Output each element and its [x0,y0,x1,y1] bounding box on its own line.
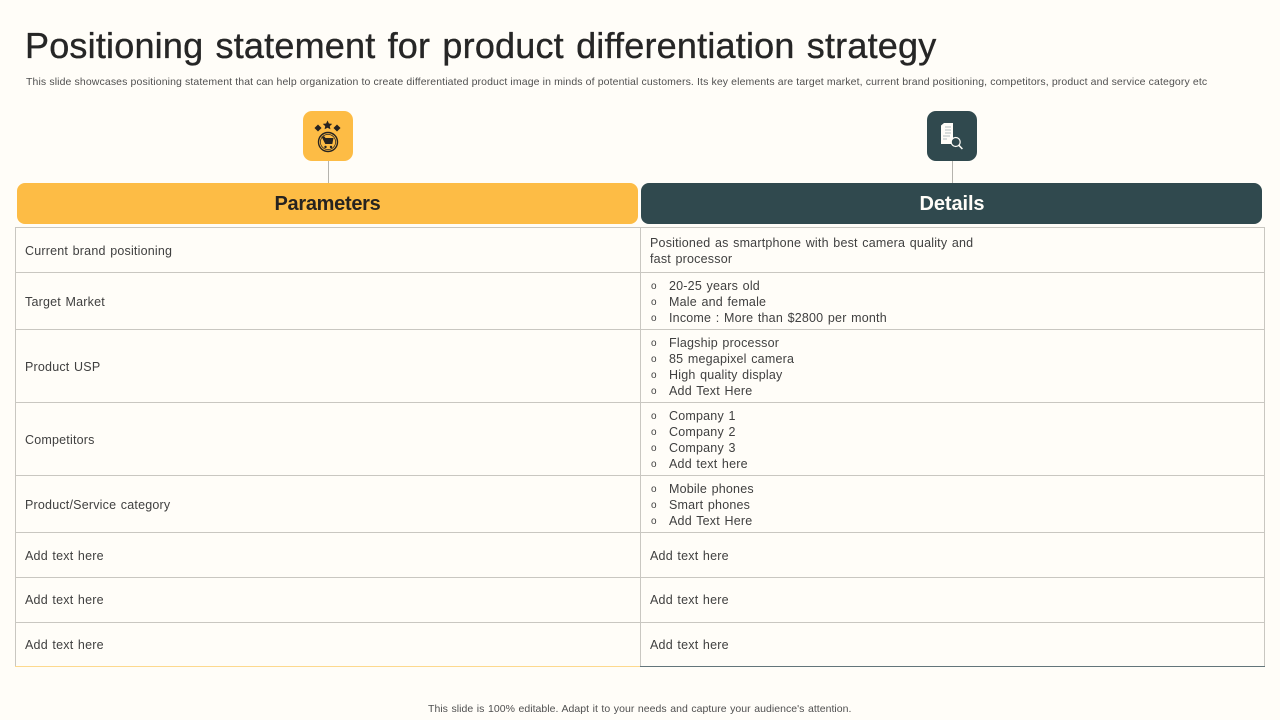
title: Positioning statement for product differentiation strategy [25,25,936,66]
detail list: product/service category: Add Text Here [669,514,752,528]
detail list: product USP: o [651,354,657,365]
detail list: competitors: Company 2 [669,425,736,439]
detail list: competitors: o [651,427,657,438]
row label: product USP: Product USP [25,360,100,374]
header: details: Details [920,193,984,215]
connector: parameters [328,161,329,183]
icon: shopping cart with stars [303,111,353,161]
detail list: target market: Male and female [669,295,766,309]
row label: add text 3: Add text here [25,638,104,652]
detail list: product/service category: Smart phones [669,498,750,512]
detail list: product USP: o [651,386,657,397]
row label: competitors: Competitors [25,433,95,447]
detail list: product USP: Add Text Here [669,384,752,398]
row label: product/service category: Product/Service category [25,498,170,512]
detail list: target market [651,279,887,325]
connector: details [952,161,953,183]
detail list: target market: Income : More than $2800 per month [669,311,887,325]
detail list: competitors: Add text here [669,457,748,471]
detail: current brand positioning: fast processor [650,252,732,266]
detail list: competitors: Company 1 [669,409,736,423]
detail list: product USP: Flagship processor [669,336,779,350]
detail list: competitors: o [651,459,657,470]
detail list: product USP: o [651,338,657,349]
table [15,227,1265,667]
subtitle: This slide showcases positioning statement that can help organization to create differentiated product image in minds of potential customers. Its key elements are target market, current brand positioning, competitors, product and service category etc [26,76,1207,88]
detail list: product/service category [651,482,754,528]
detail: current brand positioning [650,236,973,266]
header: parameters [17,183,638,224]
footer note: This slide is 100% editable. Adapt it to your needs and capture your audience's attention. [428,703,851,715]
row label: current brand positioning: Current brand positioning [25,244,172,258]
detail list: competitors: Company 3 [669,441,736,455]
detail list: product USP: High quality display [669,368,782,382]
detail list: product USP: o [651,370,657,381]
detail list: target market: o [651,313,657,324]
detail: add text 2: Add text here [650,593,729,607]
row label: target market: Target Market [25,295,105,309]
detail list: product/service category: o [651,500,657,511]
detail list: product USP [651,336,794,398]
detail list: product/service category: o [651,484,657,495]
detail list: target market: o [651,297,657,308]
detail list: target market: 20-25 years old [669,279,760,293]
header: details [641,183,1262,224]
detail: add text 1: Add text here [650,549,729,563]
detail list: competitors: o [651,411,657,422]
detail list: competitors [651,409,748,471]
detail list: competitors: o [651,443,657,454]
row label: add text 2: Add text here [25,593,104,607]
detail list: target market: o [651,281,657,292]
row label: add text 1: Add text here [25,549,104,563]
header: parameters: Parameters [275,193,380,215]
detail list: product USP: 85 megapixel camera [669,352,794,366]
detail list: product/service category: o [651,516,657,527]
detail list: product/service category: Mobile phones [669,482,754,496]
icon: document with magnifier [927,111,977,161]
detail: current brand positioning: Positioned as smartphone with best camera quality and [650,236,973,250]
detail: add text 3: Add text here [650,638,729,652]
